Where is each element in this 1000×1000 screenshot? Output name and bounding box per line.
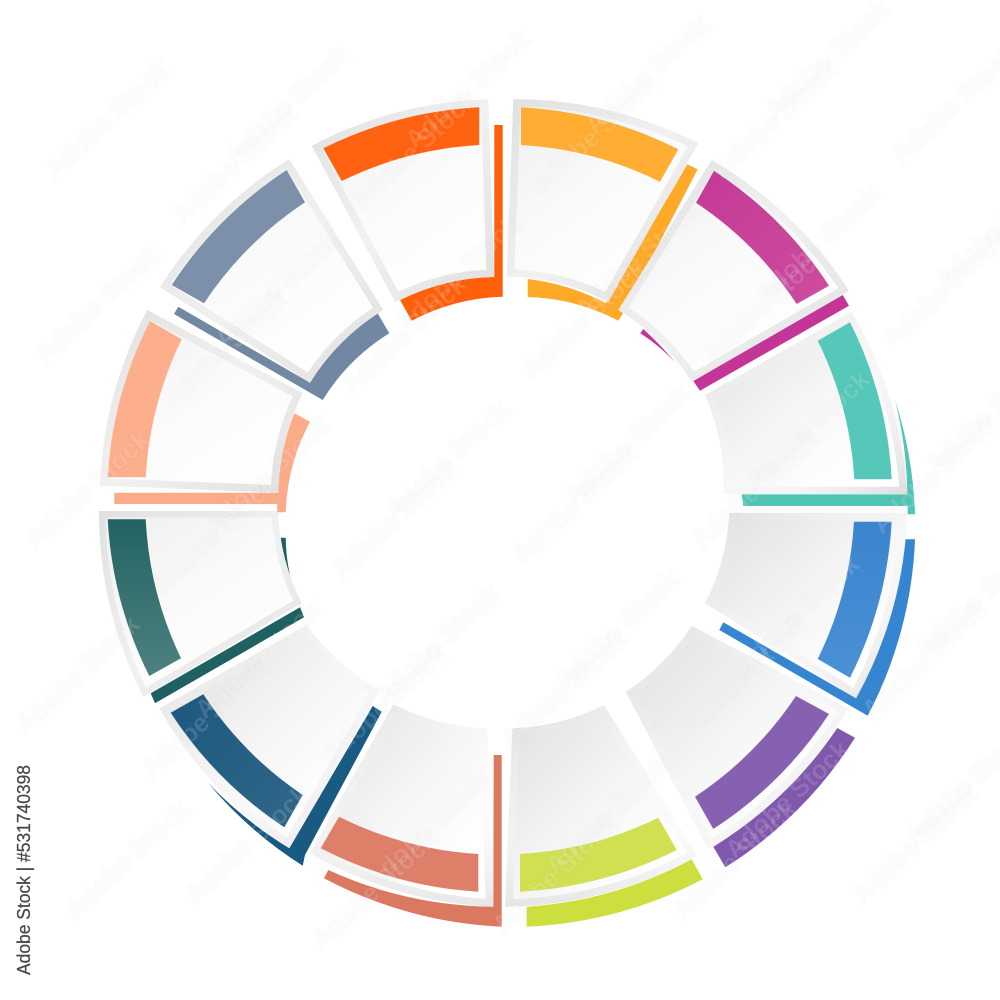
segment: blue	[705, 513, 915, 716]
magenta back stripe	[640, 295, 849, 391]
purple back arc	[713, 728, 855, 867]
peach back shape	[114, 413, 310, 512]
watermark pattern: Adobe Stock	[389, 209, 526, 339]
segment: coral	[310, 704, 502, 927]
slate panel	[160, 159, 383, 383]
watermark pattern: Adobe Stock	[209, 224, 346, 354]
watermark pattern: Adobe Stock	[59, 794, 196, 924]
watermark pattern: Adobe Stock	[559, 379, 696, 509]
lime band	[520, 818, 677, 892]
dark teal back stripe	[151, 538, 304, 703]
magenta band	[696, 171, 829, 304]
orange band	[323, 107, 479, 181]
lime panel	[505, 705, 698, 907]
slate band	[172, 170, 305, 303]
watermark pattern: Adobe Stock	[526, 69, 663, 199]
watermark pattern: Adobe Stock	[156, 284, 293, 414]
watermark pattern: Adobe Stock	[706, 54, 843, 184]
watermark pattern: Adobe Stock	[136, 654, 273, 784]
teal back shape	[742, 400, 915, 514]
segment: purple	[626, 626, 855, 867]
watermark pattern: Adobe Stock	[719, 734, 856, 864]
watermark pattern: Adobe Stock	[676, 609, 813, 739]
watermark pattern: Adobe Stock	[516, 254, 653, 384]
teal panel	[705, 312, 907, 494]
lime back arc	[527, 859, 703, 927]
yellow panel	[507, 99, 698, 302]
watermark pattern: Adobe Stock	[496, 624, 633, 754]
segment: dark teal	[99, 511, 304, 703]
watermark pattern: Adobe Stock	[39, 54, 176, 184]
blue back shape	[719, 539, 915, 716]
orange back shape	[400, 125, 503, 321]
watermark pattern: Adobe Stock	[749, 179, 886, 309]
watermark pattern: Adobe Stock	[379, 394, 516, 524]
watermark pattern: Adobe Stock	[696, 239, 833, 369]
dark teal panel	[99, 511, 302, 697]
watermark pattern: Adobe Stock	[486, 809, 623, 939]
magenta panel	[618, 160, 849, 382]
watermark pattern: Adobe Stock	[846, 779, 983, 909]
watermark pattern: Adobe Stock	[166, 99, 303, 229]
slate back shape	[174, 307, 389, 400]
segment: magenta	[618, 160, 849, 391]
watermark pattern: Adobe Stock	[326, 454, 463, 584]
purple band	[695, 696, 829, 829]
watermark pattern: Adobe Stock	[399, 24, 536, 154]
watermark pattern: Adobe Stock	[316, 639, 453, 769]
stock id caption: Adobe Stock | #531740398	[14, 765, 34, 975]
watermark pattern: Adobe Stock	[9, 609, 146, 739]
segment: slate	[160, 159, 389, 400]
orange panel	[312, 99, 494, 302]
peach panel	[100, 310, 303, 493]
watermark pattern: Adobe Stock	[579, 9, 716, 139]
watermark pattern: Adobe Stock	[359, 764, 496, 894]
navy back shape	[208, 706, 382, 866]
watermark pattern: Adobe Stock	[506, 439, 643, 569]
teal band	[818, 322, 892, 479]
segment: orange	[312, 99, 503, 321]
coral band	[321, 817, 478, 892]
segment: teal	[705, 312, 915, 514]
blue panel	[705, 513, 907, 698]
dark teal band	[108, 519, 181, 676]
watermark pattern: Adobe Stock	[146, 469, 283, 599]
watermark pattern: Adobe Stock	[306, 824, 443, 954]
watermark pattern: Adobe Stock	[29, 239, 166, 369]
watermark pattern: Adobe Stock	[539, 749, 676, 879]
watermark pattern: Adobe Stock	[369, 579, 506, 709]
yellow band	[521, 107, 678, 182]
watermark pattern: Adobe Stock	[219, 39, 356, 169]
segment: peach	[100, 310, 310, 512]
navy panel	[159, 625, 380, 848]
segment: lime	[505, 705, 703, 927]
yellow back shape	[528, 164, 698, 321]
navy band	[171, 694, 303, 827]
watermark pattern: Adobe Stock	[549, 564, 686, 694]
watermark pattern: Adobe Stock	[189, 594, 326, 724]
watermark pattern: Adobe Stock	[179, 779, 316, 909]
watermark pattern: Adobe Stock	[866, 409, 1000, 539]
watermark pattern: Adobe Stock	[666, 794, 803, 924]
watermark pattern: Adobe Stock	[686, 424, 823, 554]
watermark pattern: Adobe Stock	[729, 549, 866, 679]
coral panel	[310, 704, 493, 907]
purple panel	[626, 626, 848, 850]
watermark pattern: Adobe Stock	[19, 424, 156, 554]
segment: yellow	[507, 99, 698, 321]
watermark pattern: Adobe Stock	[336, 269, 473, 399]
coral back shape	[324, 755, 502, 927]
blue band	[818, 522, 892, 678]
watermark pattern: Adobe Stock	[739, 364, 876, 494]
watermark pattern: Adobe Stock	[569, 194, 706, 324]
watermark pattern: Adobe Stock	[199, 409, 336, 539]
segment: navy	[159, 625, 382, 866]
watermark pattern: Adobe Stock	[346, 84, 483, 214]
peach band	[108, 321, 182, 477]
watermark pattern: Adobe Stock	[856, 594, 993, 724]
